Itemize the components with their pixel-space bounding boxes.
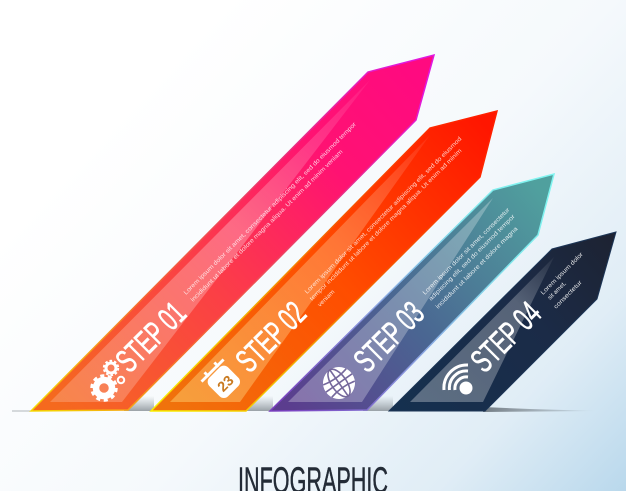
arrow: step 03 bbox=[270, 174, 554, 411]
arrow 3 body text bbox=[422, 207, 520, 310]
arrow 3 body text: adipiscing elit, sed do eiusmod tempor bbox=[428, 214, 517, 302]
arrow 1 body text: Lorem ipsum dolor sit amet, consectetur adipiscing elit, sed do eiusmod tempor bbox=[183, 122, 358, 296]
arrow 4 body text: consectetur bbox=[553, 280, 584, 310]
arrow 2 body text: tempor incididunt ut labore et dolore magna aliqua. Ut enim ad minim bbox=[309, 148, 463, 302]
arrow 2 body text: Lorem ipsum dolor sit amet, consectetur adipiscing elit, sed do eiusmod bbox=[304, 136, 463, 295]
arrow 2 highlight bbox=[170, 135, 430, 402]
arrow 2 body text: veniam bbox=[317, 289, 336, 308]
icon: wifi bbox=[444, 365, 472, 394]
arrow 3 body text: Lorem ipsum dolor sit amet, consectetur bbox=[422, 207, 511, 296]
arrow 1 highlight bbox=[50, 80, 370, 402]
arrow 1 heading: STEP 01 bbox=[108, 294, 193, 379]
arrow 4 heading: STEP 04 bbox=[463, 294, 548, 379]
icon: globe bbox=[317, 361, 361, 405]
arrow 3 body bbox=[270, 174, 554, 411]
arrow 4 body text: Lorem ipsum dolor bbox=[540, 252, 585, 296]
arrow 4 body bbox=[389, 232, 616, 411]
icon: calendar: 23 bbox=[215, 373, 237, 395]
arrow 1 body bbox=[31, 55, 434, 411]
arrow 4 body text: sit amet, bbox=[547, 281, 568, 301]
arrow 2 body bbox=[151, 111, 497, 411]
ground shadows bbox=[12, 396, 598, 412]
arrow 3 body text: incididunt ut labore et dolore magna bbox=[435, 226, 520, 310]
icon: gears bbox=[92, 361, 124, 400]
arrow 1 body text: incididunt ut labore et dolore magna aliqua. Ut enim ad minim veniam bbox=[190, 149, 344, 303]
icon: calendar bbox=[198, 356, 244, 402]
arrow 4 highlight bbox=[410, 257, 554, 402]
arrow 3 heading: STEP 03 bbox=[346, 294, 431, 379]
arrow: step 02 bbox=[151, 111, 497, 411]
arrow 4 body text bbox=[540, 252, 585, 310]
arrow: step 01 bbox=[31, 55, 434, 411]
arrow 2 heading: STEP 02 bbox=[228, 294, 313, 379]
arrow: step 04 bbox=[389, 232, 616, 411]
arrow 3 highlight bbox=[288, 198, 493, 402]
